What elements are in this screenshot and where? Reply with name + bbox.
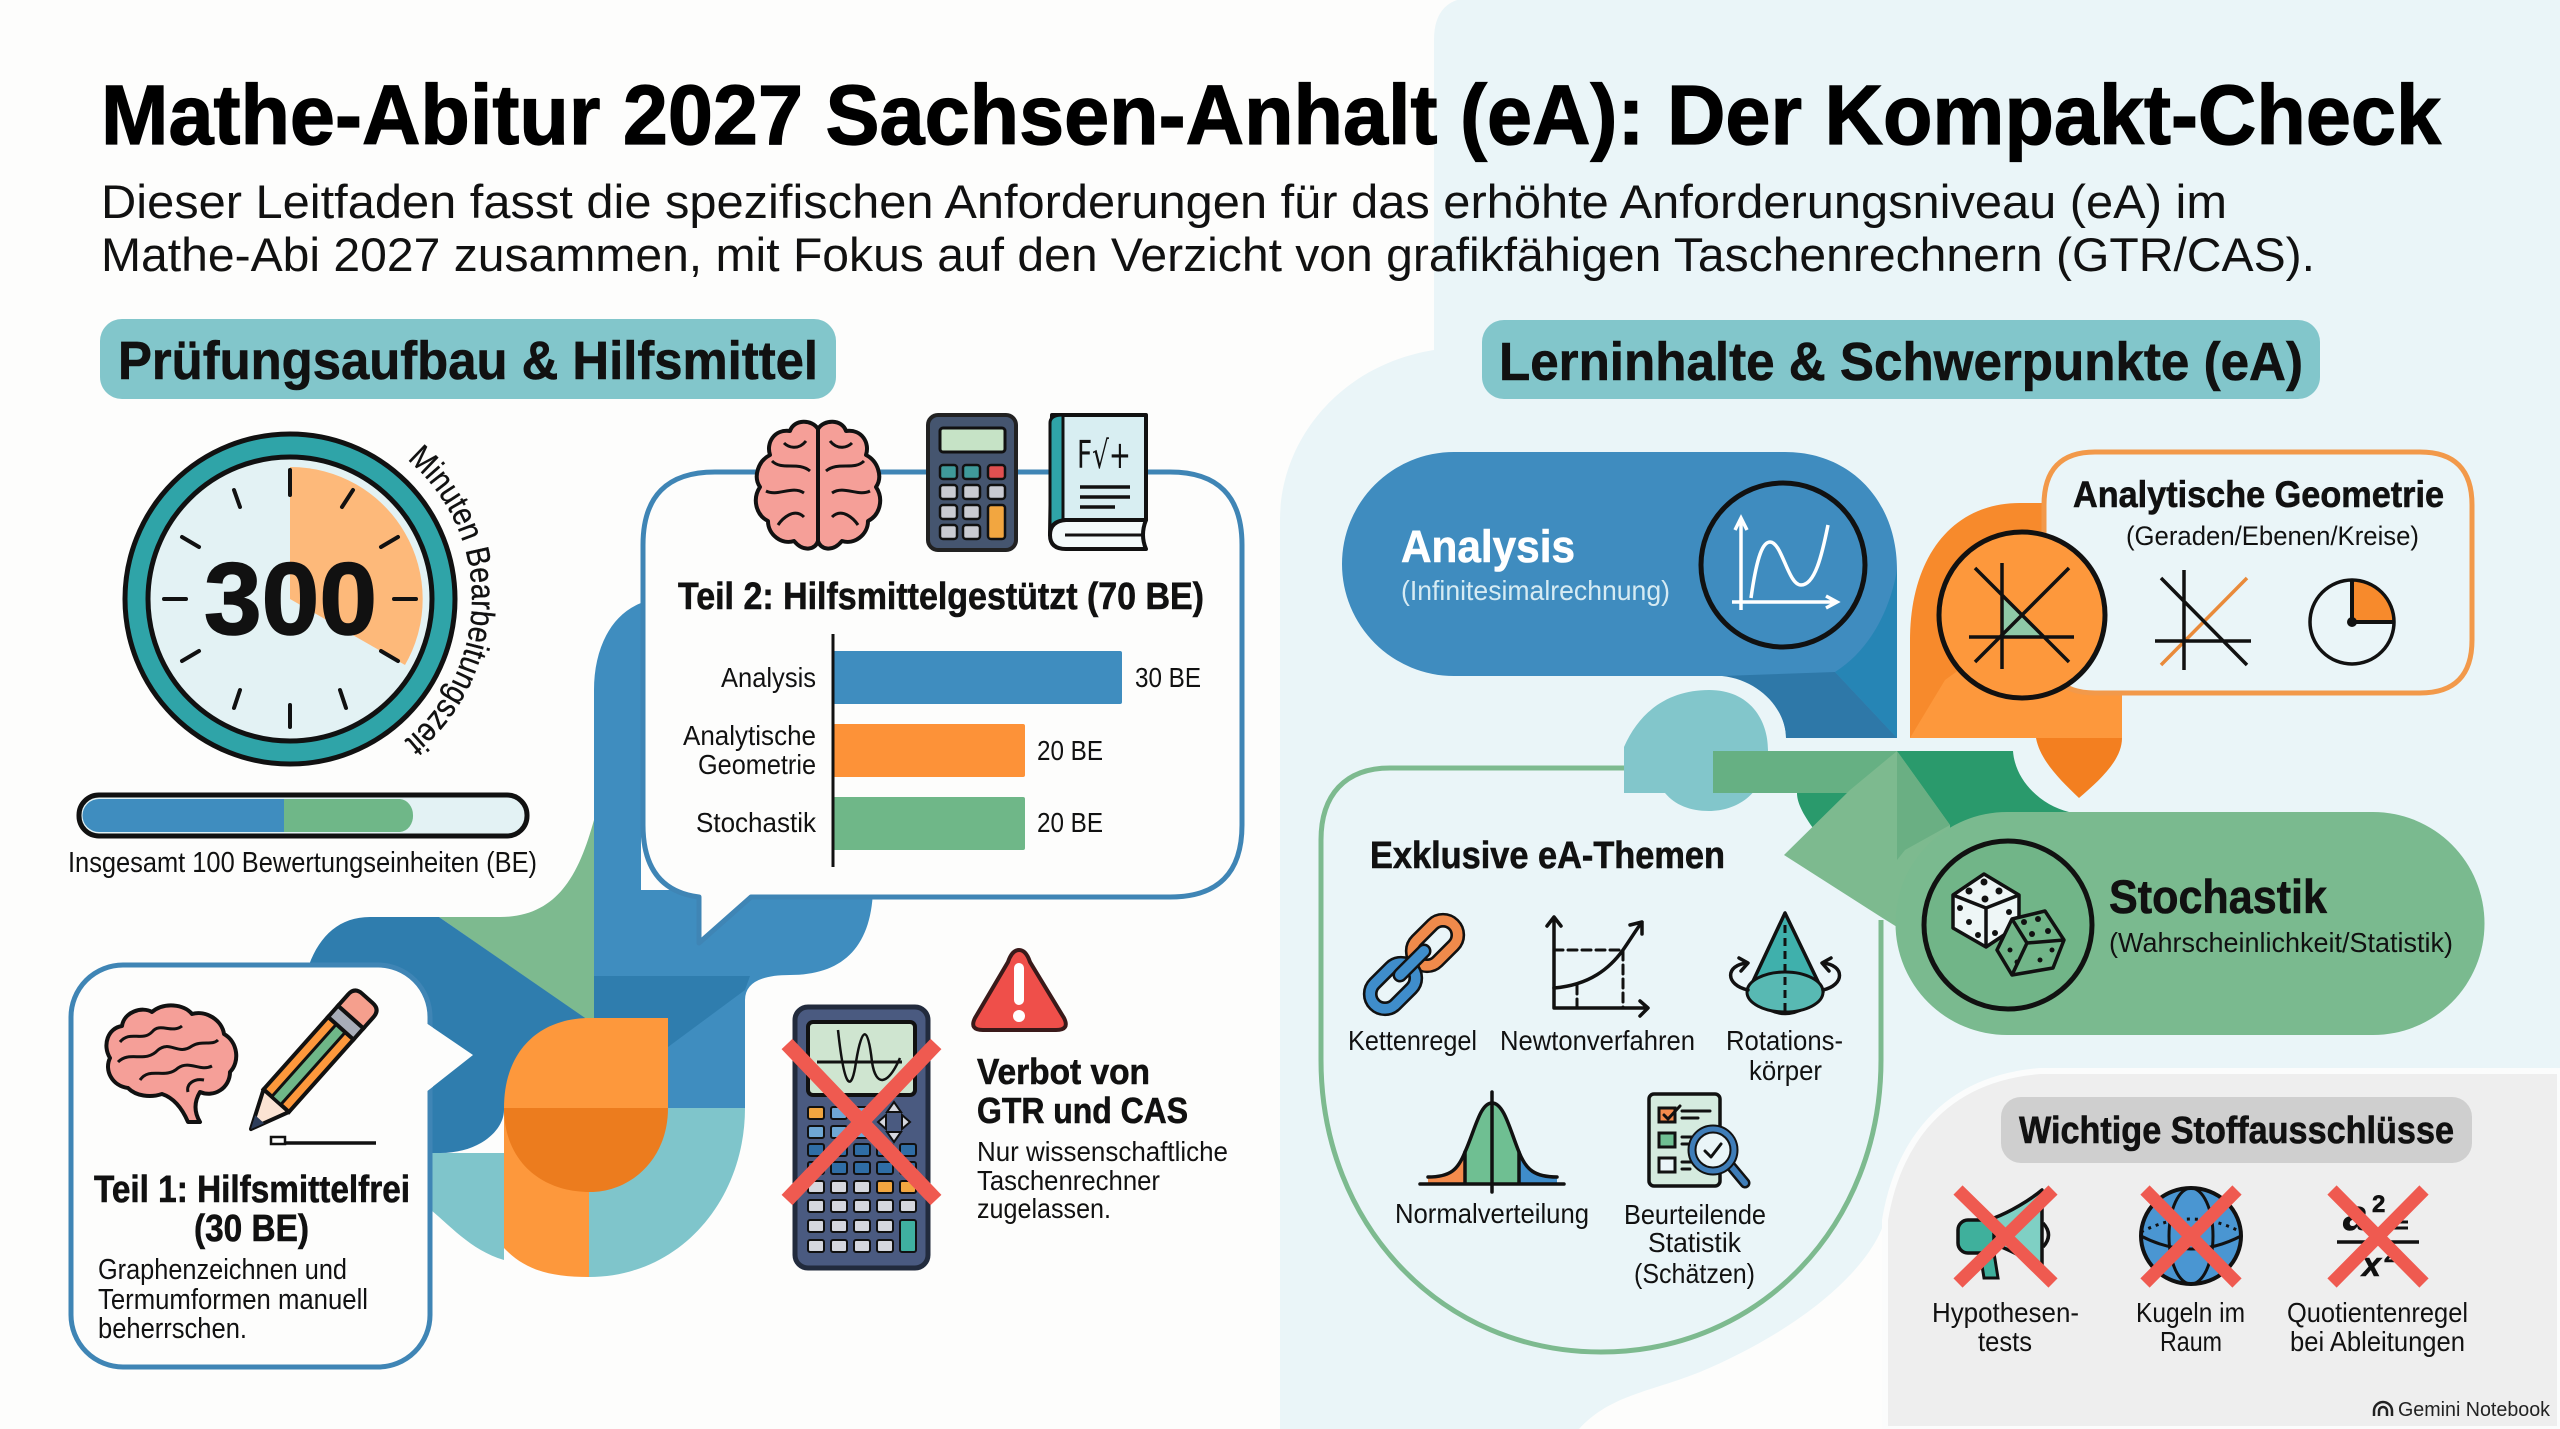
icon: crossed quotient rule — [2332, 1190, 2424, 1284]
caption: total points: Insgesamt 100 Bewertungseinheiten (BE) — [68, 847, 537, 879]
heading: Teil 2: Teil 2: Hilfsmittelgestützt (70 BE) — [678, 576, 1204, 618]
bar chart: points per topic: Stochastik — [696, 807, 817, 838]
text: GTR ban: Verbot von — [977, 1051, 1150, 1092]
bar chart: points per topic — [683, 634, 1201, 867]
pill: Stochastik — [1895, 812, 2484, 1035]
connector shapes — [1624, 690, 2069, 960]
icon: normal distribution — [1420, 1092, 1564, 1192]
icon: circle quarter — [2310, 580, 2394, 664]
bar chart: points per topic: Analytische — [683, 720, 816, 751]
text: Analytische Geometrie: Analytische Geometrie — [2073, 474, 2444, 515]
label: Hypothesentests: Hypothesen- — [1932, 1297, 2079, 1328]
text: Analysis: (Infinitesimalrechnung) — [1401, 575, 1670, 606]
panel: Teil 2 — [643, 415, 1242, 943]
background: right pale panel — [1280, 0, 2560, 1429]
panel: Exklusive eA-Themen — [1321, 768, 1881, 1352]
heading: Teil 1: (30 BE) — [194, 1208, 309, 1250]
bar chart: points per topic: 20 BE — [1037, 807, 1103, 838]
icon: lines in circle — [1939, 532, 2105, 698]
icon: Newton method graph — [1547, 917, 1648, 1016]
text: Teil 1 body — [98, 1254, 368, 1345]
icon: formula book — [1050, 415, 1146, 549]
bar chart: points per topic: Geometrie — [698, 749, 816, 780]
label: Quotientenregel: Quotientenregel — [2287, 1297, 2468, 1328]
label: Kugeln im Raum: Kugeln im — [2136, 1297, 2245, 1328]
icon: brain — [756, 422, 880, 549]
icon: rotation solid — [1731, 913, 1840, 1014]
curved label: Minuten Bearbeitungszeit: Minuten Bearbeitungszeit — [404, 444, 496, 756]
icon: drawn line — [270, 1137, 376, 1144]
icon: intersecting lines — [2155, 570, 2251, 670]
subtitle: Dieser Leitfaden fasst die spezifischen Anforderungen für das erhöhte Anforderungsniveau (eA) im — [101, 175, 2227, 228]
icon: crossed quotient rule: 2 — [2372, 1191, 2385, 1218]
label: Rotationskörper — [1726, 1025, 1843, 1086]
text: GTR ban: GTR und CAS — [977, 1090, 1188, 1131]
icon: checklist with magnifier — [1649, 1094, 1745, 1186]
label: Kettenregel: Kettenregel — [1348, 1025, 1477, 1056]
icon: formula book: F√+ — [1077, 433, 1131, 477]
bar chart: points per topic: 20 BE — [1037, 735, 1103, 766]
text: Stochastik: Stochastik — [2109, 870, 2328, 923]
text: Teil 1 body: beherrschen. — [98, 1313, 247, 1345]
text: Analysis — [1401, 521, 1670, 606]
icon: function graph — [1701, 483, 1865, 647]
timer: 300 minutes: 300 — [204, 542, 377, 656]
icon: brain side view — [106, 1005, 236, 1122]
heading: Lerninhalte & Schwerpunkte: Lerninhalte & Schwerpunkte (eA) — [1499, 332, 2303, 392]
text: GTR ban: Taschenrechner — [977, 1165, 1160, 1196]
icon: crossed graphing calculator — [787, 1007, 936, 1268]
icon: crossed sphere — [2141, 1188, 2241, 1284]
text: Teil 1 body: Graphenzeichnen und — [98, 1254, 347, 1286]
heading: Prüfungsaufbau & Hilfsmittel: Prüfungsaufbau & Hilfsmittel — [118, 331, 818, 391]
bar chart: points per topic: 30 BE — [1135, 662, 1201, 693]
text: Stochastik — [2109, 870, 2453, 958]
timer: 300 minutes — [125, 434, 455, 764]
icon: crossed quotient rule: 2 — [2384, 1245, 2395, 1267]
label: Kugeln im Raum: Raum — [2160, 1326, 2222, 1357]
icon: crossed megaphone — [1958, 1190, 2053, 1283]
label: Beurteilende Statistik — [1624, 1199, 1766, 1289]
label: Quotientenregel — [2287, 1297, 2468, 1357]
pill: Analysis — [1342, 452, 1897, 738]
heading: Wichtige Stoffausschlüsse: Wichtige Stoffausschlüsse — [2019, 1110, 2454, 1152]
bar chart: points per topic: Analysis — [721, 662, 816, 693]
label: Rotationskörper: körper — [1749, 1055, 1822, 1086]
heading: Wichtige Stoffausschlüsse — [2001, 1097, 2472, 1163]
label: Beurteilende Statistik: (Schätzen) — [1634, 1258, 1755, 1289]
text: GTR ban: Nur wissenschaftliche — [977, 1136, 1228, 1167]
panel: Teil 1 — [71, 965, 473, 1367]
label: Rotationskörper: Rotations- — [1726, 1025, 1843, 1056]
heading: Teil 1: Teil 1: Hilfsmittelfrei — [94, 1169, 410, 1211]
heading: Teil 1 — [94, 1169, 410, 1250]
icon: crossed quotient rule: x — [2360, 1246, 2383, 1284]
label: Hypothesentests: tests — [1978, 1326, 2032, 1357]
label: Normalverteilung: Normalverteilung — [1395, 1198, 1589, 1229]
panel: Analytische Geometrie — [1939, 452, 2472, 698]
icon: pencil — [238, 987, 380, 1140]
icon: dice — [1924, 841, 2092, 1009]
text: Teil 1 body: Termumformen manuell — [98, 1284, 368, 1316]
label: Beurteilende Statistik: Statistik — [1648, 1227, 1742, 1258]
text: GTR ban — [977, 1051, 1228, 1224]
text: Stochastik: (Wahrscheinlichkeit/Statistik) — [2109, 927, 2453, 958]
icon: calculator — [928, 415, 1016, 550]
label: Hypothesentests — [1932, 1297, 2079, 1357]
icon: warning triangle — [973, 950, 1066, 1030]
background flow shapes left — [300, 603, 873, 1277]
subtitle: Mathe-Abi 2027 zusammen, mit Fokus auf den Verzicht von grafikfähigen Taschenrechnern (GTR/CAS). — [101, 228, 2315, 281]
label: Quotientenregel: bei Ableitungen — [2290, 1326, 2465, 1357]
subtitle — [101, 175, 2315, 281]
icon: crossed quotient rule: a — [2343, 1191, 2367, 1240]
watermark: Gemini Notebook: Gemini Notebook — [2398, 1399, 2551, 1421]
text: Analysis: Analysis — [1401, 521, 1575, 572]
shape: geometry orange body — [1910, 503, 2122, 798]
text: GTR ban: zugelassen. — [977, 1193, 1111, 1224]
label: Newtonverfahren: Newtonverfahren — [1500, 1025, 1695, 1056]
icon: chain links — [1364, 914, 1464, 1015]
title: Mathe-Abitur 2027 Sachsen-Anhalt (eA): Der Kompakt-Check — [101, 68, 2441, 162]
text: Analytische Geometrie — [2073, 474, 2444, 551]
heading: Exklusive: Exklusive eA-Themen — [1370, 835, 1725, 877]
label: Kugeln im Raum — [2136, 1297, 2245, 1357]
background: grey exclusions panel — [1885, 1071, 2560, 1429]
label: Beurteilende Statistik: Beurteilende — [1624, 1199, 1766, 1230]
progress bar: total points — [79, 795, 527, 836]
text: Analytische Geometrie: (Geraden/Ebenen/Kreise) — [2126, 521, 2419, 551]
